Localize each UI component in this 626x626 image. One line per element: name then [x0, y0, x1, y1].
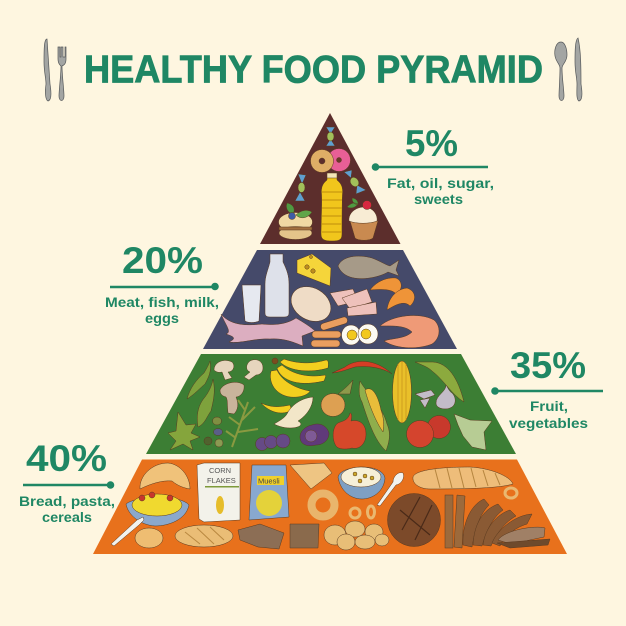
icon: right candy	[344, 170, 366, 194]
icon: chili	[332, 361, 392, 374]
icon: bananas	[270, 358, 328, 397]
icon: tomatoes	[406, 416, 450, 448]
icon: bagel	[312, 494, 334, 516]
callout: 40 percent: 40%	[26, 438, 107, 479]
icon: peeled banana	[261, 397, 313, 428]
panel: fruit and vegetables tier	[146, 354, 516, 454]
icon: green chili pepper	[415, 362, 464, 402]
icon: bacon slices	[330, 289, 377, 316]
icon: onion	[321, 380, 353, 416]
icon: pasta bowl	[111, 492, 189, 546]
callout: 5 percent: sweets	[414, 192, 463, 207]
icon: parsley	[168, 412, 200, 450]
icon: knife and fork	[44, 39, 66, 101]
icon: round loaf	[388, 494, 440, 546]
callout: 35 percent: Fruit,	[530, 399, 568, 414]
icon: corn flakes box	[197, 463, 240, 522]
label: flakes text: FLAKES	[207, 476, 236, 485]
icon: boiled eggs	[342, 324, 378, 345]
callout: 35 percent: 35%	[510, 345, 586, 386]
icon: spoon and knife	[555, 38, 582, 101]
icon: small rings	[350, 488, 517, 518]
icon: rye bread slices	[238, 524, 319, 549]
icon: pastry triangle	[290, 463, 332, 489]
panel: fats tier	[260, 113, 400, 244]
callout: 5 percent: Fat, oil, sugar,	[387, 176, 494, 191]
callout: 40 percent: Bread, pasta,	[19, 494, 115, 509]
callout: 5 percent: 5%	[405, 123, 458, 164]
callout: 20 percent: 20%	[122, 240, 203, 281]
callout: 35 percent: vegetables	[509, 416, 588, 431]
icon: top candy	[326, 127, 335, 146]
icon: spoon	[377, 473, 404, 506]
title: HEALTHY FOOD PYRAMID	[84, 48, 543, 92]
callout: 5 percent	[372, 123, 494, 207]
callout: 20 percent	[105, 240, 219, 326]
callout: 20 percent: Meat, fish, milk,	[105, 295, 219, 310]
icon: arugula leaves	[187, 361, 214, 427]
panel: grains tier	[93, 460, 567, 554]
icon: milk bottle	[265, 254, 289, 317]
icon: chicken	[285, 280, 337, 328]
callout: 40 percent: cereals	[42, 510, 92, 525]
icon: rusks	[324, 521, 389, 550]
icon: muesli bag	[249, 465, 289, 520]
icon: donuts	[310, 148, 350, 172]
icon: left candy	[295, 174, 306, 201]
icon: sliced brown loaf	[445, 495, 550, 548]
icon: red bell pepper	[333, 413, 366, 449]
icon: onion slices	[256, 434, 290, 450]
icon: garlic	[415, 385, 455, 409]
icon: croissant	[140, 463, 190, 489]
icon: purple figs	[300, 424, 329, 446]
icon: corn cob	[392, 361, 412, 423]
icon: olives	[204, 417, 223, 447]
icon: cereal bowl	[338, 467, 385, 499]
icon: mint leaf	[454, 414, 492, 450]
icon: cheese	[297, 254, 331, 286]
icon: sliced mushrooms	[220, 382, 244, 414]
label: corn flakes text: CORN	[209, 466, 231, 475]
panel: protein tier	[203, 250, 457, 349]
icon: glass of milk	[242, 285, 261, 322]
icon: whole mushrooms	[214, 360, 263, 380]
icon: shrimps	[370, 278, 415, 310]
callout: 40 percent	[19, 438, 115, 525]
icon: fish	[338, 256, 399, 279]
icon: rosemary	[226, 400, 258, 447]
callout: 20 percent: eggs	[145, 311, 179, 326]
callout: 35 percent	[491, 345, 603, 431]
icon: cupcake	[347, 198, 378, 240]
icon: squid	[221, 314, 315, 346]
icon: baguette	[413, 467, 513, 489]
icon: loaf of bread	[175, 525, 233, 547]
icon: macaron	[278, 203, 312, 240]
icon: salmon steak	[380, 315, 439, 348]
label: muesli text: Muesli	[258, 476, 280, 486]
icon: oil bottle	[321, 173, 343, 241]
icon: corn in husk	[359, 381, 389, 451]
icon: small croissant	[135, 528, 163, 548]
icon: sausages	[311, 316, 348, 347]
